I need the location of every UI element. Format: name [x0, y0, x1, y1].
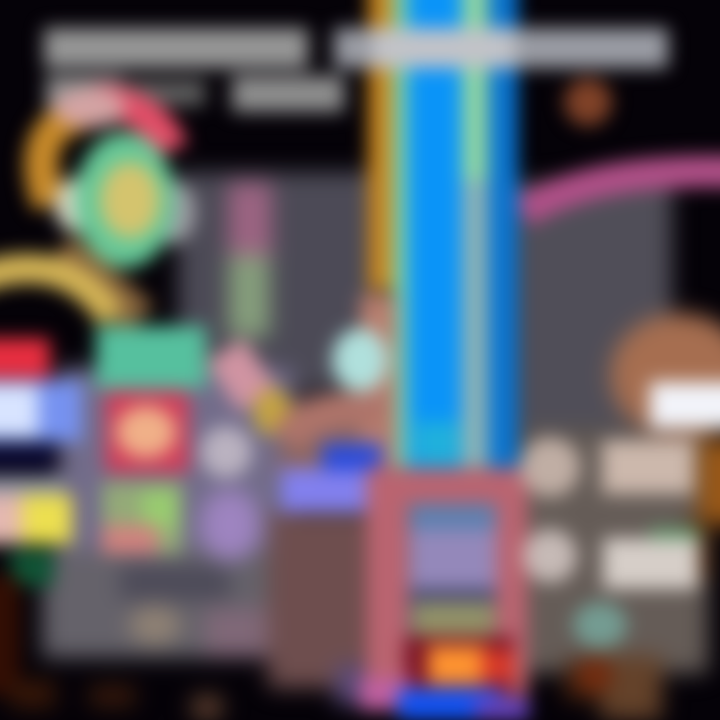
- rose arc, top right: [522, 171, 720, 212]
- pink diagonal ribbon with gold tip: [225, 350, 291, 436]
- panel: lower right: [518, 428, 708, 720]
- icon: blue and periwinkle banner: [281, 443, 383, 512]
- accent dot, top right: [564, 78, 612, 126]
- icon: red and blue badge, left edge: [0, 338, 82, 469]
- panel: lower tower: [360, 468, 529, 720]
- icon: red square: [105, 391, 189, 473]
- panel: upper right grey: [512, 182, 672, 437]
- vertical accent strip: [228, 182, 272, 337]
- central tower stripes: [368, 0, 518, 470]
- brown arc connector: [285, 408, 385, 440]
- icon: grey circle: [200, 426, 252, 478]
- panel: lower left: [42, 368, 293, 658]
- panel: lower middle brown: [268, 400, 390, 705]
- icon: yellow label, left edge: [0, 476, 72, 695]
- title: [44, 28, 668, 112]
- icon: teal banner: [96, 326, 206, 388]
- salmon column left of tower: [360, 295, 396, 470]
- footer glow: [10, 680, 222, 720]
- panel: upper left grey: [178, 172, 382, 392]
- icon: head medallion: [41, 88, 196, 320]
- right column: cards: [520, 382, 720, 693]
- icon: purple blob: [200, 489, 260, 561]
- gold arc, left edge: [0, 268, 112, 318]
- icon: teal circle: [332, 328, 388, 392]
- icon: green square: [102, 482, 182, 554]
- orange brown cluster, right edge: [610, 313, 720, 580]
